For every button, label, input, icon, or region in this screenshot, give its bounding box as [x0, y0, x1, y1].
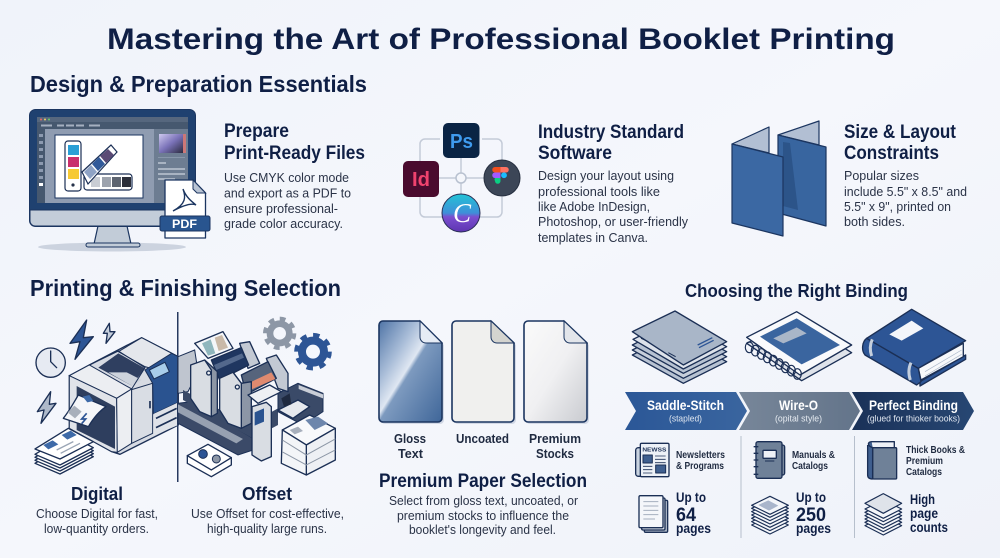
- label: thick books and premium catalogs: Catalogs: [906, 466, 942, 478]
- panel: industry standard software: [403, 122, 688, 245]
- text block: [538, 168, 688, 245]
- text block: low-quantity orders.: [44, 521, 149, 536]
- stat: up to 64 pages: [676, 490, 711, 536]
- banner: perfect binding: (glued for thioker books): [867, 414, 960, 424]
- label: digital: Digital: [71, 484, 123, 504]
- stat: up to 64 pages: pages: [676, 521, 711, 536]
- panel: premium paper selection: [379, 321, 589, 537]
- icon: thick book: [868, 442, 897, 479]
- heading: Choosing the Right Binding: [685, 280, 908, 301]
- text block: both sides.: [844, 214, 905, 229]
- panel: choosing the right binding: [625, 280, 974, 538]
- icon: monitor with colour swatches: [30, 110, 196, 252]
- banner: wire-o: Wire-O: [779, 398, 818, 413]
- text block: Choose Digital for fast,: [36, 506, 158, 521]
- text block: [844, 168, 967, 229]
- text block: professional tools like: [538, 184, 660, 199]
- divider: [177, 312, 178, 482]
- subheading: Software: [538, 143, 612, 164]
- subheading: Print-Ready Files: [224, 143, 365, 164]
- text block: like Adobe InDesign,: [538, 199, 650, 214]
- icon: tall page stack: [752, 496, 788, 534]
- stat: up to 250 pages: [796, 490, 831, 536]
- text block: Design your layout using: [538, 168, 674, 183]
- illustration: digital press: [35, 320, 178, 474]
- text block: include 5.5" x 8.5" and: [844, 184, 967, 199]
- label: manuals and catalogs: Catalogs: [792, 460, 828, 472]
- text block: premium stocks to influence the: [397, 508, 569, 523]
- text block: Use Offset for cost-effective,: [191, 506, 344, 521]
- icon: gloss text sheet: [379, 321, 444, 424]
- icon: single stack of pages: [639, 496, 668, 532]
- banner: perfect binding: [852, 392, 974, 430]
- banner: saddle-stitch: Saddle-Stitch: [647, 398, 724, 413]
- text block: [36, 506, 158, 536]
- banner: saddle-stitch: (stapled): [669, 414, 702, 424]
- title: Mastering the Art of Professional Booklet Printing: [107, 23, 895, 56]
- icon: manual: [754, 442, 785, 478]
- banner: perfect binding: Perfect Binding: [869, 398, 958, 413]
- label: gloss text: Gloss: [394, 431, 426, 446]
- subheading: Size & Layout: [844, 122, 957, 143]
- text block: templates in Canva.: [538, 230, 648, 245]
- icon: uncoated sheet: [452, 321, 516, 424]
- subheading: Constraints: [844, 143, 939, 164]
- icon: newsletter: [636, 443, 669, 477]
- stat: high page counts: [910, 492, 948, 535]
- text block: [191, 506, 344, 536]
- label: uncoated: Uncoated: [456, 431, 509, 446]
- text block: Photoshop, or user-friendly: [538, 214, 688, 229]
- subheading: Industry Standard: [538, 122, 684, 143]
- icon: premium stock sheet: [524, 321, 589, 424]
- text block: 5.5" x 9", printed on: [844, 199, 951, 214]
- text block: Select from gloss text, uncoated, or: [389, 493, 579, 508]
- stat: up to 250 pages: pages: [796, 521, 831, 536]
- label: thick books and premium catalogs: Thick Books &: [906, 444, 965, 456]
- icon: software logos: C: [453, 198, 472, 228]
- text block: high-quality large runs.: [207, 521, 327, 536]
- text block: ensure professional-: [224, 201, 338, 216]
- label: premium stocks: Premium: [529, 431, 581, 446]
- icon: high page stack: [865, 494, 902, 535]
- panel: size and layout constraints: [732, 121, 967, 236]
- stat: high page counts: counts: [910, 520, 948, 535]
- subheading: Premium Paper Selection: [379, 471, 587, 492]
- icon: saddle-stitch stack: [632, 311, 727, 383]
- text block: booklet's longevity and feel.: [409, 522, 556, 537]
- banner: saddle-stitch: [625, 392, 747, 430]
- icon: software logos: Id: [412, 169, 430, 191]
- stat: high page counts: High: [910, 492, 935, 507]
- text block: [389, 493, 579, 537]
- banner: wire-o: (opital style): [775, 414, 822, 424]
- icon: pdf document: [160, 180, 210, 238]
- panel: digital printing: [35, 320, 178, 536]
- panel: prepare print-ready files: [30, 110, 365, 252]
- label: manuals and catalogs: Manuals &: [792, 449, 835, 461]
- subheading: Prepare: [224, 121, 289, 142]
- heading: printing and finishing selection: Printing & Finishing Selection: [30, 275, 341, 301]
- icon: software logos: Ps: [450, 131, 473, 153]
- text block: Use CMYK color mode: [224, 170, 349, 185]
- stat: high page counts: page: [910, 506, 938, 521]
- label: thick books and premium catalogs: Premium: [906, 455, 943, 467]
- label: gloss text: Text: [398, 446, 424, 461]
- panel: offset printing: [178, 319, 344, 536]
- illustration: offset press: [178, 319, 335, 477]
- stat: up to 64 pages: 64: [676, 505, 696, 526]
- label: newsletters and programs: & Programs: [676, 460, 724, 472]
- icon: folded booklet: [732, 121, 826, 236]
- icon: software logos: [403, 123, 520, 232]
- icon: perfect bound book: [863, 309, 966, 386]
- text block: [224, 170, 351, 231]
- heading: design and preparation essentials: Design & Preparation Essentials: [30, 71, 367, 97]
- banner: wire-o: [739, 392, 860, 430]
- label: offset: Offset: [242, 484, 292, 504]
- text block: grade color accuracy.: [224, 216, 343, 231]
- icon: newsletter: NEWSS: [642, 447, 667, 453]
- label: premium stocks: Stocks: [536, 446, 574, 461]
- icon: wire-o notebook: [745, 312, 852, 381]
- text block: Popular sizes: [844, 168, 919, 183]
- stat: up to 64 pages: Up to: [676, 490, 706, 505]
- label: newsletters and programs: Newsletters: [676, 449, 725, 461]
- stat: up to 250 pages: Up to: [796, 490, 826, 505]
- stat: up to 250 pages: 250: [796, 505, 826, 526]
- text block: and export as a PDF to: [224, 186, 351, 200]
- icon: pdf document: PDF: [172, 219, 197, 231]
